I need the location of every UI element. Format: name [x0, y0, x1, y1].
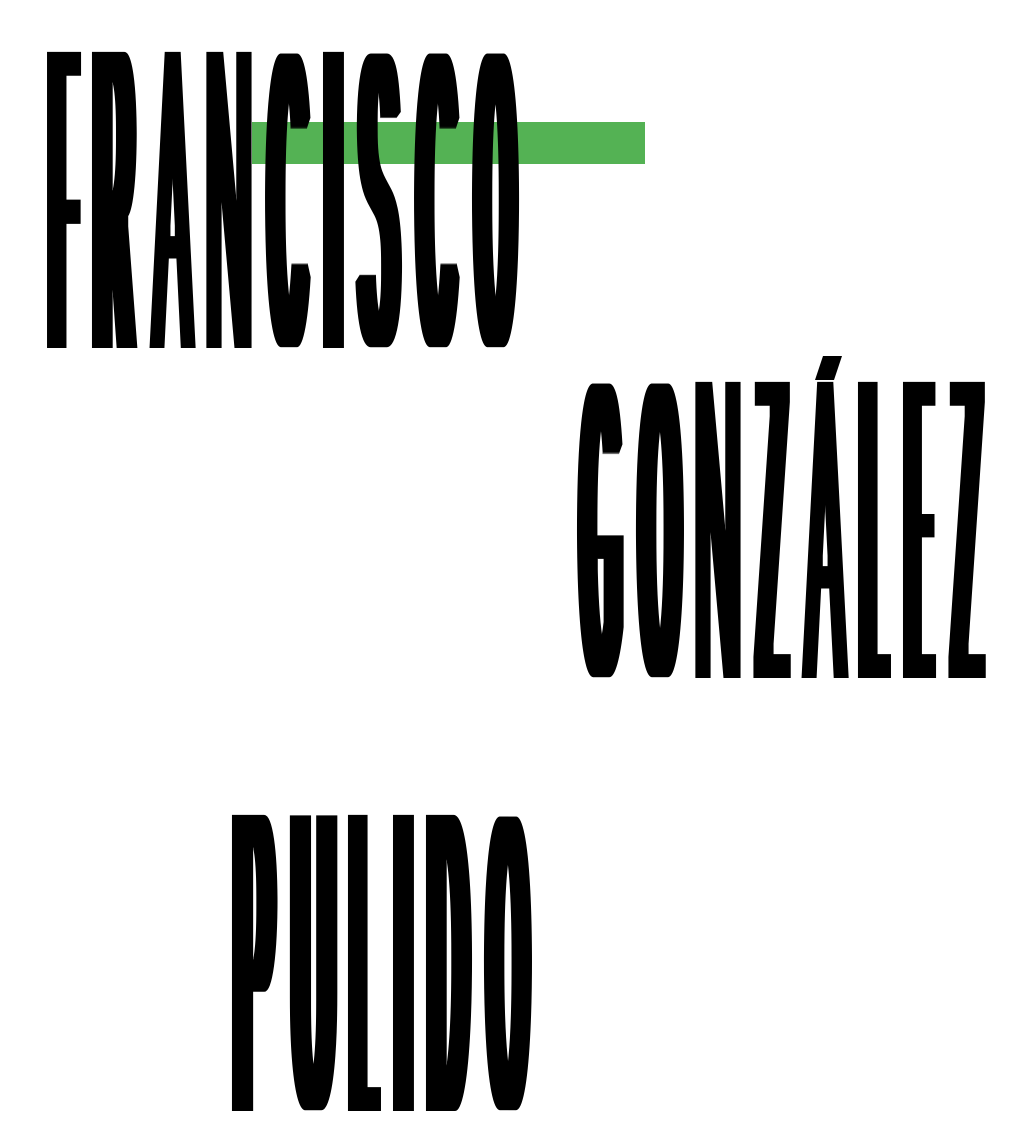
- name word: GONZÁLEZ: L: [863, 280, 884, 777]
- green accent bar: [252, 122, 645, 164]
- name word: GONZÁLEZ: O: [642, 290, 678, 769]
- name word: PULIDO: [235, 713, 526, 1145]
- name word: GONZÁLEZ: Á: [806, 282, 845, 778]
- name word: GONZÁLEZ: E: [908, 280, 929, 778]
- accent mark on the Á: [815, 356, 842, 380]
- name word: GONZÁLEZ: G: [583, 290, 619, 769]
- name word: GONZÁLEZ: Z: [955, 280, 979, 777]
- name word: GONZÁLEZ: [576, 382, 986, 678]
- name word: GONZÁLEZ: Z: [760, 280, 784, 777]
- name word: GONZÁLEZ: N: [695, 281, 741, 778]
- name word: FRANCISCO: [52, 0, 513, 449]
